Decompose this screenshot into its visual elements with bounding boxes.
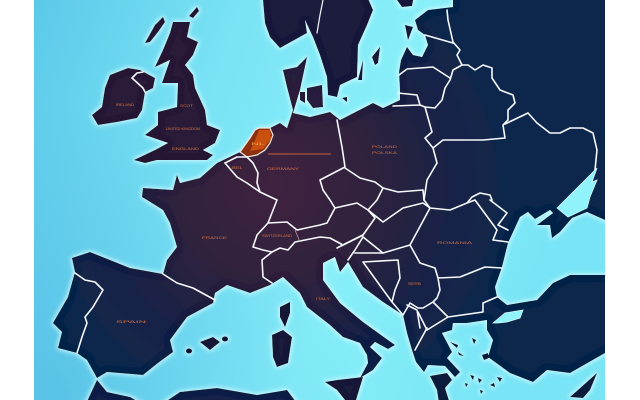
Corsica and Sardinia: [272, 302, 292, 367]
Hebrides: [145, 7, 199, 43]
label: France: FRANCE: [202, 236, 228, 240]
label: London: ENGLAND: [172, 147, 200, 151]
Ireland: [92, 68, 155, 125]
Cyprus: [570, 373, 597, 398]
label: Italy: ITALY: [316, 297, 331, 301]
Balearic Islands: [186, 336, 228, 354]
label: Poland second line: POLSKA: [372, 151, 398, 155]
label: Scotland: SCOT: [180, 104, 194, 108]
label: Spain: SPAIN: [116, 320, 147, 324]
Baltic islands: [342, 25, 413, 102]
Danish islands: [300, 85, 323, 108]
label: Romania: ROMANIA: [437, 241, 473, 245]
Sicily: [325, 377, 363, 400]
thin Swiss border: [295, 230, 300, 242]
label: Serbia: SERB: [408, 282, 422, 286]
highlighted country: Netherlands: [240, 128, 273, 157]
Germany label line: [268, 154, 331, 155]
label: Germany: GERMANY: [267, 167, 300, 171]
label: Belgium: BEL: [232, 166, 243, 170]
Peloponnese: [430, 373, 452, 400]
Greek islands: [450, 338, 502, 394]
country borders: [75, 0, 597, 353]
Scandinavia: [263, 0, 417, 97]
map labels: [116, 103, 473, 324]
Great Britain: [134, 22, 220, 163]
label: Poland: POLAND: [372, 145, 398, 149]
Sea of Marmara and Sea of Azov: [493, 168, 597, 323]
label: Switzerland: SWITZERLAND: [262, 234, 292, 238]
label: England: UNITED KINGDOM: [166, 127, 200, 131]
label: Ireland: IRELAND: [116, 103, 134, 107]
label: Netherlands: NL: [251, 142, 265, 146]
North Africa: [83, 380, 302, 400]
